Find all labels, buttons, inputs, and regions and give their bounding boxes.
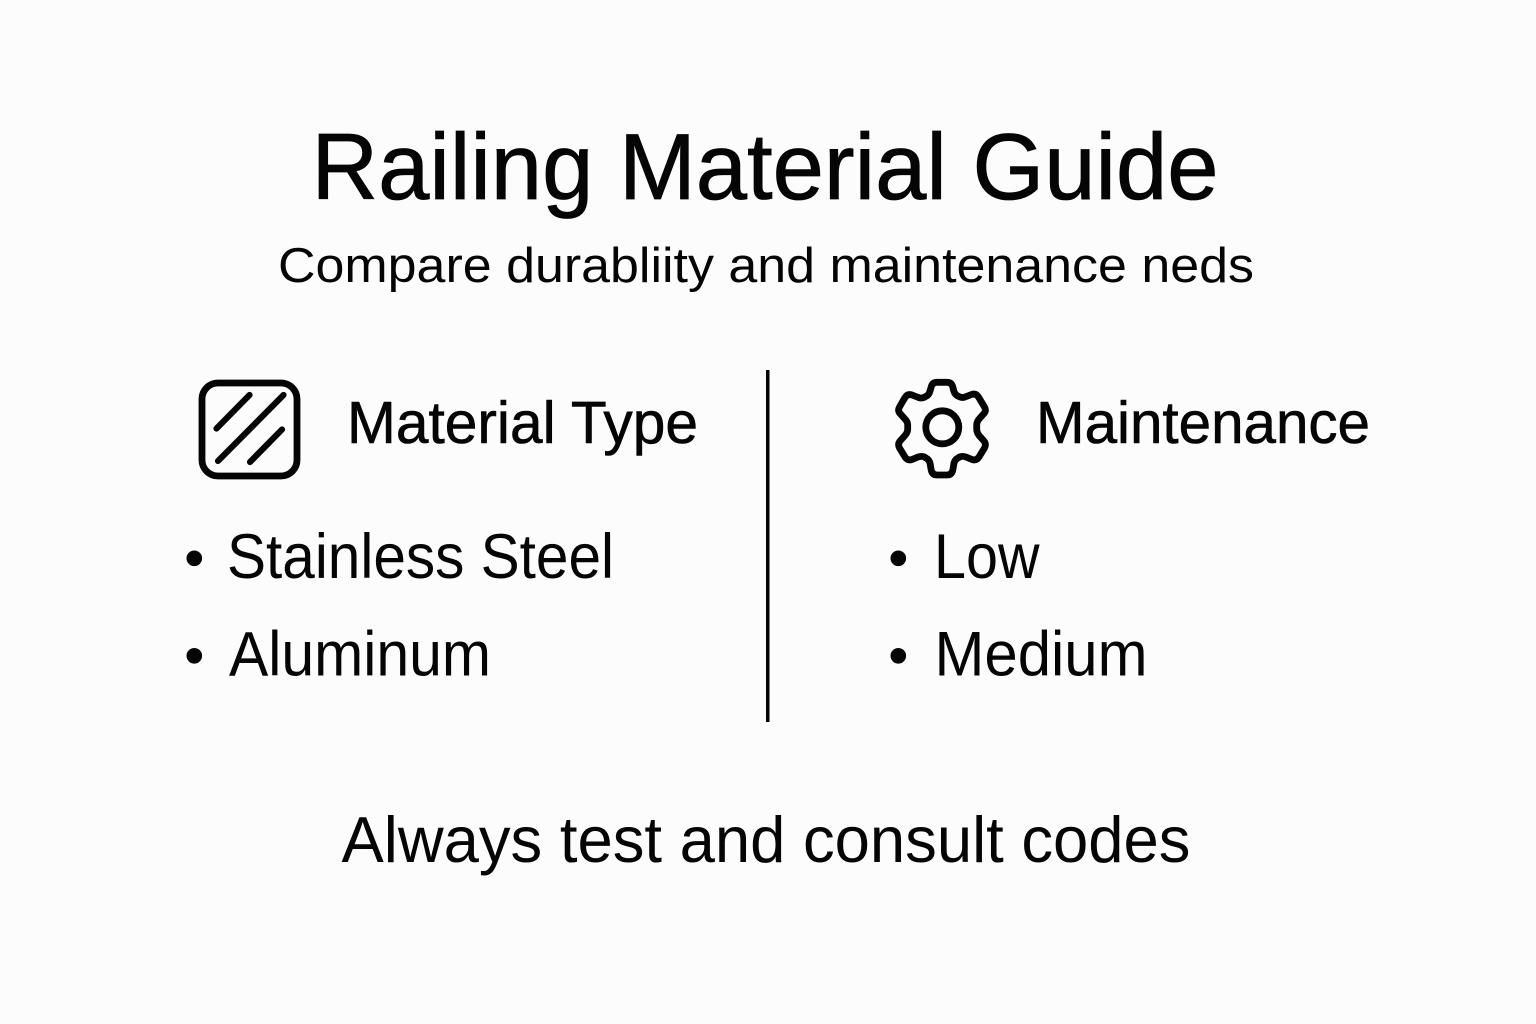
icon: gear <box>899 382 985 475</box>
panel: maintenance <box>890 382 1370 690</box>
list item: medium: Medium <box>934 620 1148 690</box>
list item: aluminum: Aluminum <box>229 620 491 690</box>
list item: low <box>890 522 1040 592</box>
heading: maintenance: Maintenance <box>1036 390 1370 456</box>
list item: stainless steel: Stainless Steel <box>227 522 614 592</box>
title: Railing Material Guide <box>312 114 1218 219</box>
heading: material type: Material Type <box>347 390 698 456</box>
icon: hatched square <box>202 383 297 476</box>
center divider <box>766 370 770 722</box>
footer note: Always test and consult codes <box>342 803 1190 876</box>
subtitle: Compare durabliity and maintenance neds <box>278 239 1254 293</box>
list item: low: Low <box>934 522 1040 592</box>
panel: material type <box>186 383 698 690</box>
